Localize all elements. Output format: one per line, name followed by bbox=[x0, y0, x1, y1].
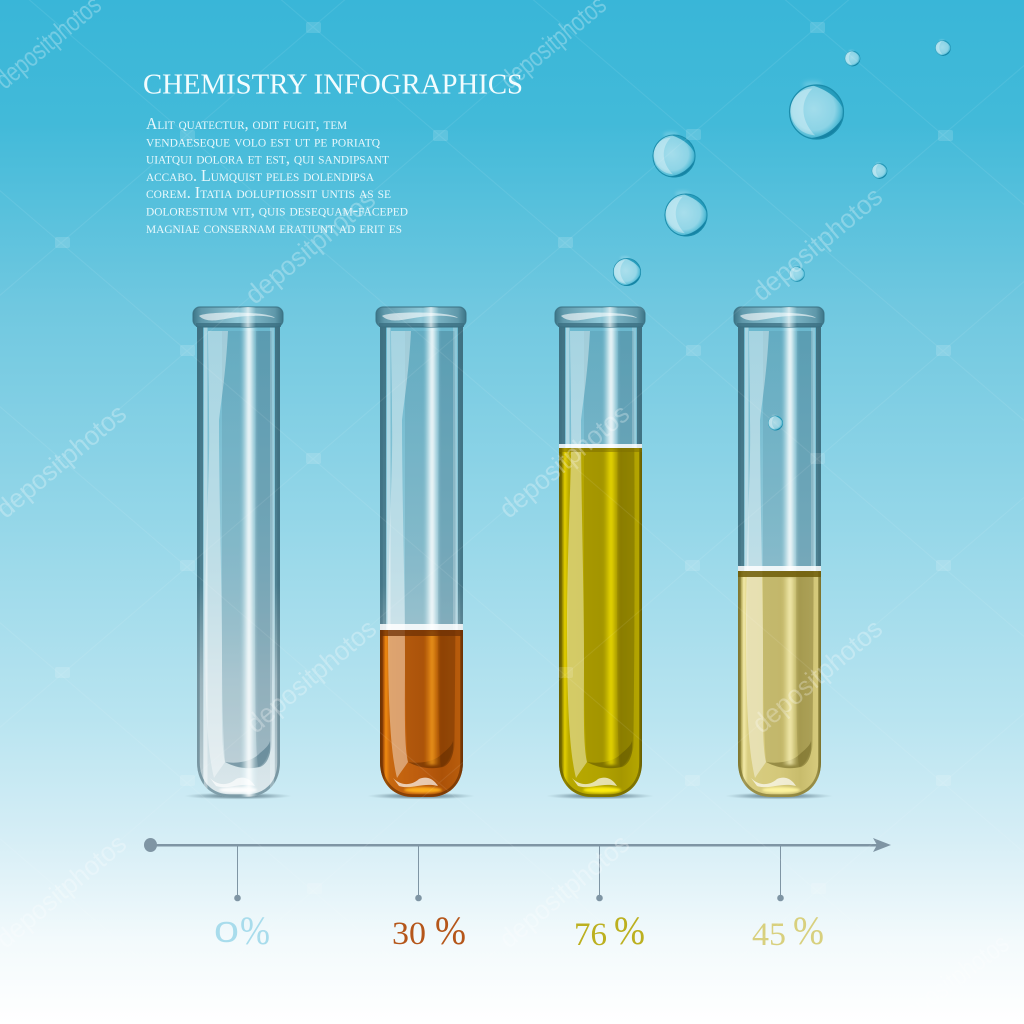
label: 30 % bbox=[392, 908, 466, 953]
intro text block: Alit quatectur, odit fugit, tem bbox=[146, 114, 347, 133]
label: 0 %: 0 bbox=[214, 917, 239, 949]
label: 76 %: % bbox=[614, 908, 645, 953]
label: 76 % bbox=[574, 908, 645, 953]
test tube: 0% empty bbox=[184, 307, 292, 800]
intro text block: vendaeseque volo est ut pe poriatq bbox=[146, 131, 380, 150]
watermark text: depositphotos bbox=[493, 828, 635, 954]
title: CHEMISTRY INFOGRAPHICS bbox=[143, 70, 523, 100]
intro text block: corem. Itatia doluptiossit untis as se bbox=[146, 183, 391, 202]
label: 30 %: % bbox=[435, 908, 466, 953]
intro text block: accabo. Lumquist peles dolendipsa bbox=[146, 166, 374, 185]
test tube: 45% pale yellow liquid bbox=[725, 307, 833, 800]
test tube: 76% yellow liquid bbox=[546, 307, 654, 800]
label: 0 %: % bbox=[240, 908, 270, 953]
intro text block bbox=[146, 114, 408, 237]
label: 45 % bbox=[752, 908, 824, 953]
label: 30 %: 30 bbox=[392, 916, 426, 952]
label: 45 %: 45 bbox=[752, 917, 786, 953]
label: 0 % bbox=[214, 908, 270, 953]
intro text block: uiatqui dolora et est, qui sandipsant bbox=[146, 149, 390, 168]
label: 45 %: % bbox=[793, 908, 824, 953]
watermark text: depositphotos bbox=[240, 613, 382, 739]
test tube: 30% orange liquid bbox=[367, 307, 475, 800]
bubbles bbox=[613, 39, 951, 430]
watermark text: depositphotos bbox=[746, 613, 888, 739]
watermark text: depositphotos bbox=[239, 184, 381, 310]
intro text block: magniae consernam eratiunt ad erit es bbox=[146, 218, 402, 237]
intro text block: dolorestium vit, quis desequam-faceped bbox=[146, 200, 408, 220]
watermark text: depositphotos bbox=[493, 398, 635, 524]
label: 76 %: 76 bbox=[574, 917, 607, 953]
watermark text: depositphotos bbox=[746, 181, 888, 307]
axis arrow with ticks bbox=[144, 838, 891, 901]
